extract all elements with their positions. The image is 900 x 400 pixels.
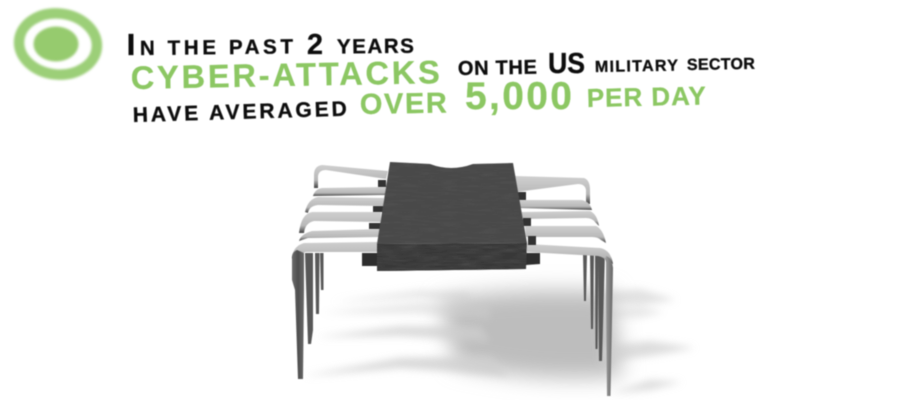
- pin L5: [299, 229, 380, 241]
- pin R1: [514, 176, 590, 204]
- icon: green target logo: [16, 10, 100, 78]
- line 3: over 5,000 per day: [360, 75, 706, 121]
- headline text: [126, 27, 755, 127]
- line 2: on the us military sector: MILITARY: [595, 58, 678, 76]
- line 2: on the us military sector: US: [548, 48, 585, 80]
- chip shadow on ground: [303, 289, 695, 393]
- pin L1: [314, 165, 388, 188]
- chip top face with notch: [377, 162, 527, 244]
- pin L2: [313, 187, 386, 196]
- pin R4: [525, 226, 606, 243]
- chip pins: front corner legs: [292, 250, 613, 396]
- chip pins: back legs: [305, 253, 605, 361]
- line 3: over 5,000 per day: PER DAY: [586, 81, 706, 113]
- line 3: have averaged: HAVE AVERAGED: [132, 98, 347, 127]
- chip pins: left metal strips: [292, 165, 388, 262]
- pin R5: [527, 244, 613, 264]
- line 1: in the past 2 years: N THE PAST: [140, 35, 294, 60]
- pin R3: [521, 211, 599, 226]
- chip body: [362, 162, 540, 271]
- line 2: on the us military sector: [458, 48, 755, 80]
- chip front face: [377, 243, 527, 271]
- line 3: over 5,000 per day: 5,000: [465, 75, 572, 118]
- pin L4: [299, 212, 381, 233]
- line 2: on the us military sector: ON THE: [458, 57, 537, 80]
- line 1: in the past 2 years: I: [126, 27, 136, 62]
- chip pins: right metal strips: [514, 176, 613, 264]
- line 3: over 5,000 per day: OVER: [360, 87, 447, 121]
- line 2: cyber-attacks: CYBER-ATTACKS: [130, 54, 440, 96]
- dark pin collars: [369, 180, 536, 245]
- line 1: in the past 2 years: 2: [307, 29, 323, 61]
- chip lower band: [362, 253, 540, 271]
- pin L6: [292, 242, 378, 262]
- pin R2: [518, 200, 592, 210]
- chip surface texture: [377, 162, 527, 271]
- pin L3: [305, 197, 384, 213]
- line 1: in the past 2 years: YEARS: [337, 35, 414, 58]
- line 2: on the us military sector: SECTOR: [687, 56, 755, 74]
- line 1: in the past 2 years: [126, 27, 414, 62]
